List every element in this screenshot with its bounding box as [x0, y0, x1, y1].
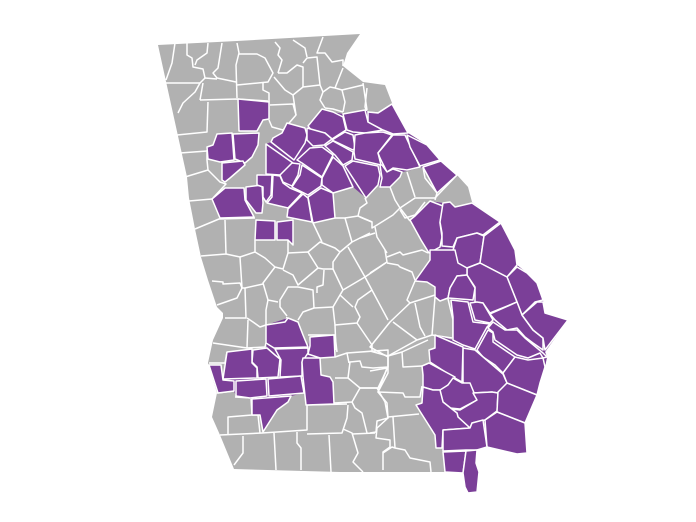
highlighted counties: northwest [207, 99, 293, 245]
highlighted counties: east [410, 201, 568, 373]
highlighted counties: southeast [416, 335, 545, 493]
county borders [166, 37, 457, 472]
state outline [158, 34, 568, 493]
purple base under adjoining counties [209, 104, 568, 493]
highlighted counties [207, 99, 568, 493]
highlighted counties: southwest [209, 318, 335, 432]
highlighted counties: north central [257, 104, 457, 223]
